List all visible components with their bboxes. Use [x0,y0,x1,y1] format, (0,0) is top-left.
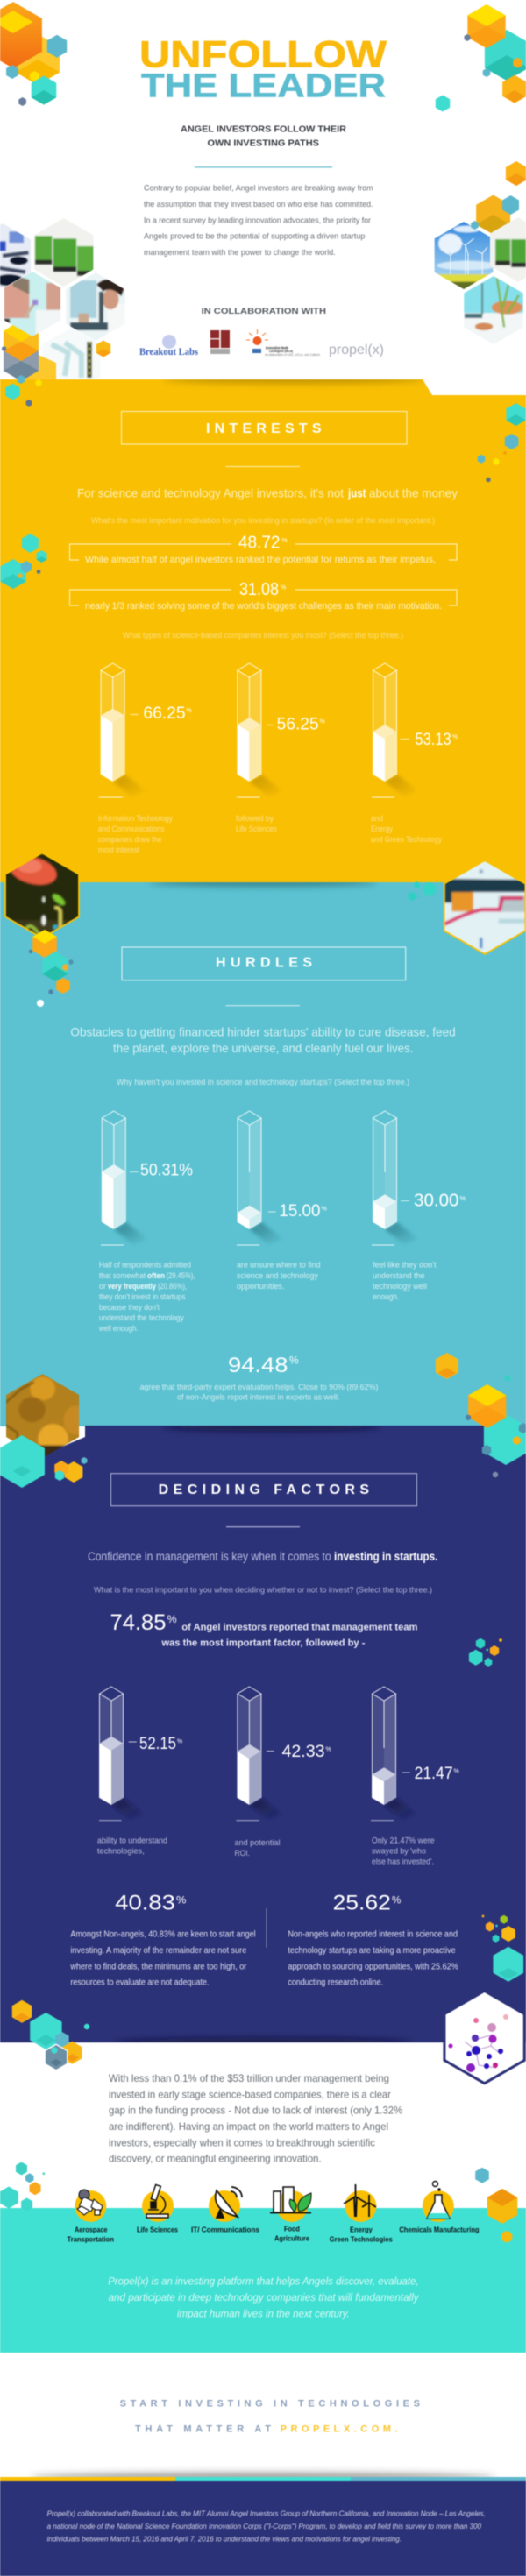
title [139,33,387,105]
industry labels [67,2225,479,2243]
bar caption: half of respondents: because they don't [99,1303,160,1312]
bar value labels: % [186,708,192,714]
stat callout: 48.72%: 48.72 [238,533,281,552]
deciding factors lead sentence: Confidence in management is key when it comes to [88,1550,331,1563]
logo: Innovation Node: Innovation Node [266,345,288,350]
bar value labels [101,1162,466,1246]
bar value labels: 66.25 [143,704,186,723]
call to action [120,2399,420,2435]
hexagon cluster: hurdles bottom right [436,1353,526,1477]
stat column: 40.83% non-angels: resources to evaluate are not adequate. [70,1978,209,1988]
bar value labels [129,1735,459,1783]
title: UNFOLLOW [139,33,387,75]
bar rules [99,1820,394,1821]
stat callout: 74.85% [110,1610,418,1649]
intro paragraph: the assumption that they invest based on who else has committed. [144,200,373,209]
industry labels: Chemicals Manufacturing [399,2225,479,2233]
bar: 30.00% [373,1111,418,1244]
closing paragraph: gap in the funding process - Not due to lack of interest (only 1.32% [109,2105,402,2117]
panel: conclusion white background [0,2042,526,2208]
bar value labels: % [319,718,325,725]
stat callout: 48.72% [70,533,457,565]
stat callout: 31.08%: 31.08 [239,580,279,599]
bar value labels: % [321,1206,327,1213]
hurdles lead sentence: the planet, explore the universe, and cleanly fuel our lives. [113,1041,414,1055]
bar caption: half of respondents: often [147,1271,165,1280]
heading: deciding factors [110,1474,417,1506]
heading: interests: INTERESTS [206,421,322,436]
photo hexagon: pills [5,1374,80,1457]
bar: 52.15% [100,1687,145,1820]
bar: 15.00% [238,1111,282,1244]
title: THE LEADER [141,68,386,105]
icon: communications satellite dish [209,2187,242,2222]
industry labels: Energy [350,2225,373,2233]
photo hexagon: man with probe [4,272,61,336]
bar caption: information technology: Information Technology [98,814,173,823]
hexagon cluster: interests left [0,534,47,589]
industry labels: IT/ Communications [191,2226,259,2234]
hexagon cube: grey and amber lower left [4,320,39,381]
survey question: motivation: What's the most important motivation for you investing in startups? (In order of the most important.) [91,516,435,526]
hexagon cluster: deciding factors top left [0,1435,87,1488]
bar caption: half of respondents: understand the technology [99,1313,184,1322]
bar caption: half of respondents: that somewhat [99,1271,146,1280]
icon: energy wind turbines [344,2184,376,2222]
heading: interests [121,412,407,444]
logo: propel(x): propel(x) [329,343,384,357]
bar caption: don't understand [373,1261,437,1301]
closing paragraph: With less than 0.1% of the $53 trillion under management being [109,2072,389,2084]
bar value labels: % [452,734,458,740]
bar value labels: 30.00 [414,1192,459,1211]
bar caption: half of respondents: well enough. [98,1324,139,1333]
photo hexagon: pink cable [438,860,526,955]
bar caption: information technology: most interest [98,846,139,854]
propel(x) statement [108,2275,420,2319]
bar value labels: % [326,1747,331,1752]
bar caption: energy: Energy [371,824,393,833]
bar caption: potential ROI: ROI. [235,1849,250,1858]
bar value labels: 42.33 [282,1743,324,1761]
bar caption: don't understand: enough. [373,1292,399,1301]
bar value labels [99,704,458,797]
closing paragraph: invested in early stage science-based companies, there is a clear [109,2088,391,2100]
subtitle: ANGEL INVESTORS FOLLOW THEIR [181,125,347,135]
stat column: 40.83% non-angels [69,1891,256,1988]
bar: 50.31% [102,1111,147,1244]
bar value labels: 50.31% [140,1162,193,1179]
closing paragraph: investors, especially when it comes to breakthrough scientific [109,2136,375,2148]
stat callout: 94.48%: % [289,1355,299,1367]
logo: Innovation Node: Los Angeles (IN-LA) [269,349,293,353]
panel rim [0,2042,443,2043]
intro paragraph: In a recent survey by leading innovation advocates, the priority for [144,216,371,225]
bar caption: ability to understand: ability to understand [97,1836,167,1845]
shadow under interests panel [149,878,377,887]
stat column: 25.62% non-angels: % [392,1894,402,1907]
bar caption: ability to understand [97,1836,167,1856]
bar: 66.25% [101,663,146,796]
bar caption: half of respondents: Half of respondents admitted [99,1261,191,1270]
bar caption: who else has invested: else has invested'. [372,1858,434,1866]
stat column: 25.62% non-angels: 25.62 [333,1891,391,1914]
hexagon cluster: hurdles top left [29,930,74,1007]
stat column: 25.62% non-angels [288,1891,458,1988]
stat column: 25.62% non-angels: conducting research online. [288,1978,383,1988]
interests lead sentence: For science and technology Angel investors, it's not [77,485,344,499]
bar caption: half of respondents: (29.45%), [167,1271,195,1280]
stat callout: 31.08% [70,580,457,612]
stat callout: 94.48% [140,1354,378,1403]
intro paragraph [144,184,373,258]
bar caption: information technology [98,814,173,854]
photo hexagon: plant jars left [33,219,95,286]
closing paragraph [109,2072,402,2165]
photo hexagon: lab detail bottom left [44,329,100,379]
hexagon: amber behind cube lower left [26,350,56,386]
hexagon cluster: hurdles top right [409,881,436,901]
industry labels: Life Sciences [137,2225,178,2233]
industry labels: Food [284,2225,300,2233]
hexagon cluster: top right [436,4,526,112]
bar value labels: 52.15 [139,1735,176,1753]
bar caption: unsure where to find [237,1261,321,1291]
hurdles lead sentence [70,1025,456,1055]
subtitle: OWN INVESTING PATHS [207,139,319,149]
photo hexagon: wind turbines [433,221,494,290]
stat callout: 74.85%: % [167,1613,177,1625]
stat column: 40.83% non-angels: where to find deals, the minimums are too high, or [69,1962,247,1971]
hurdles lead sentence: Obstacles to getting financed hinder startups' ability to cure disease, feed [70,1025,456,1039]
logo: Breakout Labs [139,335,198,357]
photo hexagon: scientist at microscope [66,273,125,340]
intro paragraph: management team with the power to change the world. [144,248,336,258]
bar caption: unsure where to find: science and technology [237,1271,318,1280]
stat column: 25.62% non-angels: technology startups are taking a more proactive [288,1946,456,1956]
stat callout: 31.08%: % [281,585,286,591]
stat callout: 74.85%: was the most important factor, followed by - [160,1638,366,1649]
photo hexagon: blue pattern [0,223,32,288]
bar caption: potential ROI [235,1838,281,1858]
bar caption: half of respondents: very frequently [108,1282,156,1291]
footnote: Propel(x) collaborated with Breakout Labs, the MIT Alumni Angel Investors Group of Northern California, and Innovation Node – Los Angeles, [47,2509,486,2517]
small hexagon dots above interests [2,221,479,407]
icon: chemicals flask [423,2182,454,2222]
industry labels: Transportation [67,2234,114,2243]
stat column: 40.83% non-angels: investing. A majority of the remainder are not sure [70,1946,247,1956]
bar caption: life sciences: followed by [236,814,274,823]
stat callout: 48.72%: While almost half of angel investors ranked the potential for returns as their impetus, [85,555,436,565]
panel: hurdles teal background [0,882,446,1426]
survey question: deciding: What is the most important to you when deciding whether or not to invest? (Select the top three.) [94,1585,432,1595]
hexagon cluster: top left [0,2,67,106]
shadow under intro panel [162,375,425,384]
bar: 21.47% [372,1687,417,1820]
icon: food agriculture beaker and leaf [270,2187,311,2222]
photo hexagon: seedling [4,853,81,936]
panel: interests yellow background [0,379,526,904]
hexagon cluster: interests right [478,403,526,482]
survey question: company types: What types of science-based companies interest you most? (Select the top three.) [123,631,403,640]
panel: footer navy [0,2481,526,2576]
hexagon cluster: navy right [482,1915,523,1982]
bar chart: deciding factors [99,1687,459,1821]
stat column: 25.62% non-angels: approach to sourcing opportunities, with 25.62% [288,1962,458,1971]
stat callout: 94.48%: of non-Angels report interest in experts as well. [177,1393,339,1403]
intro paragraph: Contrary to popular belief, Angel investors are breaking away from [144,184,373,194]
intro paragraph: Angels proved to be the potential of supporting a driven startup [144,232,365,242]
stat column: 25.62% non-angels: Non-angels who reported interest in science and [288,1930,458,1940]
call to action: PROPELX.COM. [281,2424,398,2435]
bar value labels: % [454,1768,459,1775]
bar value labels: 56.25 [277,715,319,734]
bar caption: life sciences [236,814,277,833]
industry labels: Green Technologies [330,2234,393,2243]
bar value labels: 21.47 [415,1765,453,1783]
stat column: 40.83% non-angels: % [176,1894,187,1907]
stat callout: 31.08%: nearly 1/3 ranked solving some of the world's biggest challenges as their main motivation. [85,601,442,612]
shadow above white panel [117,2035,409,2042]
bar caption: energy: and [371,814,383,823]
bar chart: interests [99,663,458,797]
heading: hurdles [122,947,406,980]
bar caption: energy: and Green Technology [371,835,442,844]
bar caption: half of respondents: they don't invest in startups [99,1292,186,1301]
bar caption: who else has invested: Only 21.47% were [372,1836,435,1845]
divider rule [226,1526,300,1527]
propel(x) statement: impact human lives in the next century. [177,2307,350,2319]
bar caption: information technology: and Communications [98,824,165,833]
bar value labels: 15.00 [279,1202,321,1221]
collaboration heading: IN COLLABORATION WITH [202,307,326,316]
heading: hurdles: HURDLES [216,955,312,970]
interests lead sentence: just [347,485,366,499]
stat callout: 74.85%: 74.85 [110,1610,166,1635]
logo: Innovation Node: A collaboration of USC, UCLA, and Caltech [265,353,320,357]
stat callout: 74.85%: of Angel investors reported that management team [181,1622,418,1632]
bar caption: potential ROI: and potential [235,1838,281,1847]
photo hexagon: molecule [443,1989,526,2085]
stat column: 40.83% non-angels: 40.83 [115,1891,175,1914]
logo: Innovation Node [246,329,320,357]
heading: deciding factors: DECIDING FACTORS [159,1483,369,1497]
tricolour bar [0,2477,526,2481]
logo: MIT alumni angels [210,330,230,354]
bar value labels: % [459,1194,466,1202]
icon: life sciences microscope [142,2184,174,2222]
bar caption: unsure where to find: opportunities. [237,1282,284,1291]
bar caption: half of respondents: (20.86%), [158,1282,187,1291]
propel(x) statement: and participate in deep technology companies that will fundamentally [109,2291,420,2304]
divider rule [226,1005,300,1006]
bar caption: ability to understand: technologies, [97,1847,145,1856]
propel(x) statement: Propel(x) is an investing platform that helps Angels discover, evaluate, [108,2275,419,2288]
stat callout: 94.48%: 94.48 [228,1354,288,1377]
survey question: why not invested: Why haven't you invested in science and technology startups? (Select the top three.) [117,1078,409,1087]
deciding factors lead sentence: investing in startups. [334,1550,437,1563]
closing paragraph: discovery, or meaningful engineering innovation. [109,2153,322,2165]
call to action: START INVESTING IN TECHNOLOGIES [120,2399,420,2410]
call to action: THAT MATTER AT [135,2424,271,2435]
subtitle [181,125,347,149]
footnote: individuals between March 15, 2016 and April 7, 2016 to understand the views and motivations for angel investing. [47,2535,402,2544]
photo hexagon: seedlings [459,276,526,344]
bar caption: unsure where to find: are unsure where to find [237,1261,321,1270]
photo hexagon: plant jars right [486,217,526,282]
footnote [47,2509,486,2544]
hexagon cluster: deciding right [469,1638,502,1667]
hexagon cluster: navy left [12,2000,89,2071]
panel: turquoise industries band [0,2208,526,2353]
bar caption: half of respondents: or [99,1282,106,1291]
bar chart: hurdles [101,1111,466,1246]
bar caption: energy [371,814,442,844]
divider rule [195,166,332,168]
closing paragraph: are indifferent). Having an impact on the world matters to Angel [109,2120,388,2133]
logo: Breakout Labs: Breakout Labs [139,347,198,357]
shadow under hurdles panel [165,1426,379,1433]
stat column: 40.83% non-angels: Amongst Non-angels, 40.83% are keen to start angel [70,1930,256,1940]
bar: 42.33% [238,1687,282,1820]
hexagon cluster: band left [0,2162,45,2212]
bar caption: don't understand: feel like they don't [373,1261,437,1270]
bar caption: who else has invested [372,1836,435,1866]
bar caption: don't understand: understand the [373,1271,424,1280]
hexagon cluster: middle right [476,161,526,235]
interests lead sentence: about the money [369,485,458,499]
hexagon cluster: band right [475,2168,517,2242]
bar caption: who else has invested: swayed by 'who [372,1847,426,1856]
bar value labels: % [177,1738,182,1745]
bar value labels: 53.13 [415,731,451,749]
panel: intro white background [0,0,526,456]
industry labels: Agriculture [274,2234,309,2243]
bar caption: half of respondents [98,1261,195,1333]
stat callout: 48.72%: % [282,538,288,544]
footnote: a national node of the National Science Foundation Innovation Corps ("I-Corps") Program, to develop and field this survey to more than 300 [47,2522,481,2530]
panel: deciding factors navy background [0,1426,526,2042]
icon: aerospace astronaut [75,2190,106,2222]
industry labels: Aerospace [75,2225,108,2233]
stat callout: 94.48%: agree that third-party expert evaluation helps. Close to 90% (89.62%) [140,1383,378,1392]
bar: 56.25% [238,663,282,796]
shadow above footer [31,2473,495,2481]
bar caption: information technology: companies draw the [98,835,161,844]
divider rule [226,466,300,467]
bar caption: don't understand: technology well [373,1282,427,1291]
bar: 53.13% [373,663,418,796]
bar caption: life sciences: Life Sciences [236,824,277,833]
